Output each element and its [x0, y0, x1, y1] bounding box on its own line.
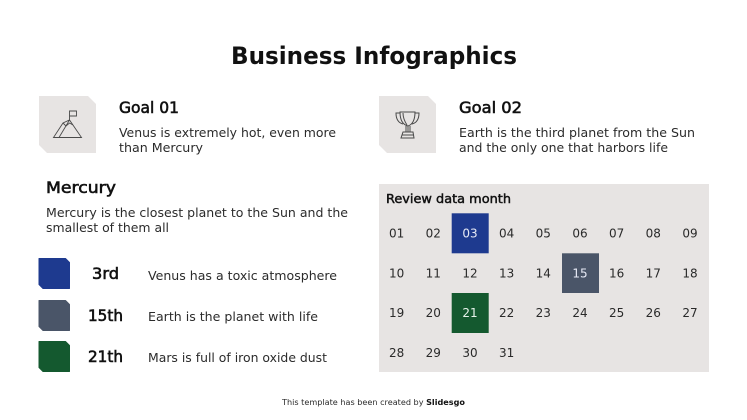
calendar row 3: 20	[426, 306, 441, 320]
footer credit: This template has been created by Slidesgo	[281, 398, 465, 407]
label: 21th: 21th	[88, 347, 123, 366]
calendar row 3: 24	[572, 306, 588, 320]
text block: mercury description	[46, 206, 348, 235]
calendar row 1: 05	[536, 226, 551, 240]
calendar row 1: 07	[609, 226, 624, 240]
calendar row 3: 26	[646, 306, 661, 320]
calendar row 1: 08	[646, 226, 661, 240]
calendar row 3: 19	[389, 306, 404, 320]
icon: trophy	[379, 96, 436, 153]
text block: goal 01 description	[119, 126, 336, 155]
calendar row 4: 31	[499, 346, 514, 360]
calendar row 4	[389, 346, 514, 360]
title: Business Infographics	[231, 42, 517, 70]
icon: slate swatch	[39, 300, 70, 330]
heading: mercury: Mercury	[46, 178, 116, 197]
calendar row 1: 02	[426, 226, 441, 240]
calendar row 3	[389, 306, 698, 320]
icon: green swatch	[39, 342, 70, 372]
calendar row 2: 16	[609, 266, 624, 280]
heading: review data month: Review data month	[386, 191, 511, 206]
calendar row 1: 09	[682, 226, 698, 240]
panel: goal 01	[39, 96, 336, 155]
heading: goal 01: Goal 01	[119, 98, 179, 117]
panel: calendar	[379, 184, 709, 372]
calendar row 2: 13	[499, 266, 514, 280]
highlight: day 15	[562, 253, 599, 293]
text block: goal 02 description	[459, 126, 695, 155]
heading: goal 02: Goal 02	[459, 98, 522, 117]
text: earth: Earth is the planet with life	[148, 310, 318, 324]
label: 3rd: 3rd	[92, 264, 119, 283]
calendar row 3: 23	[536, 306, 551, 320]
calendar row 1	[389, 226, 698, 240]
calendar row 2: 15	[572, 266, 588, 280]
calendar row 2	[389, 266, 698, 280]
highlight: day 21	[452, 293, 489, 333]
calendar row 4: 29	[426, 346, 441, 360]
panel: goal 02	[379, 96, 695, 155]
legend row: 15th	[39, 300, 318, 330]
calendar row 1: 04	[499, 226, 514, 240]
label: 15th: 15th	[88, 306, 123, 325]
calendar row 1: 01	[389, 226, 404, 240]
legend row: 21th	[39, 342, 327, 372]
calendar row 2: 10	[389, 266, 404, 280]
text: mars: Mars is full of iron oxide dust	[148, 351, 327, 365]
calendar row 2: 14	[536, 266, 551, 280]
text block: goal 01 description: than Mercury	[119, 141, 203, 155]
icon: blue swatch	[39, 258, 70, 288]
highlight: day 03	[452, 213, 489, 253]
calendar row 2: 18	[682, 266, 698, 280]
text block: mercury description: smallest of them all	[46, 221, 169, 235]
calendar row 4: 28	[389, 346, 404, 360]
text block: goal 02 description: and the only one that harbors life	[459, 141, 668, 155]
calendar row 4: 30	[462, 346, 478, 360]
calendar row 2: 11	[426, 266, 441, 280]
calendar row 3: 27	[682, 306, 698, 320]
text block: goal 01 description: Venus is extremely hot, even more	[119, 126, 336, 140]
calendar row 2: 17	[646, 266, 661, 280]
text block: mercury description: Mercury is the closest planet to the Sun and the	[46, 206, 348, 220]
calendar row 3: 22	[499, 306, 514, 320]
text: venus: Venus has a toxic atmosphere	[148, 269, 337, 283]
calendar row 1: 06	[572, 226, 588, 240]
calendar row 2: 12	[462, 266, 478, 280]
text block: goal 02 description: Earth is the third planet from the Sun	[459, 126, 695, 140]
legend row: 3rd	[39, 258, 337, 288]
calendar row 3: 21	[462, 306, 478, 320]
calendar row 3: 25	[609, 306, 624, 320]
calendar row 1: 03	[462, 226, 478, 240]
icon: mountain with flag	[39, 96, 96, 153]
